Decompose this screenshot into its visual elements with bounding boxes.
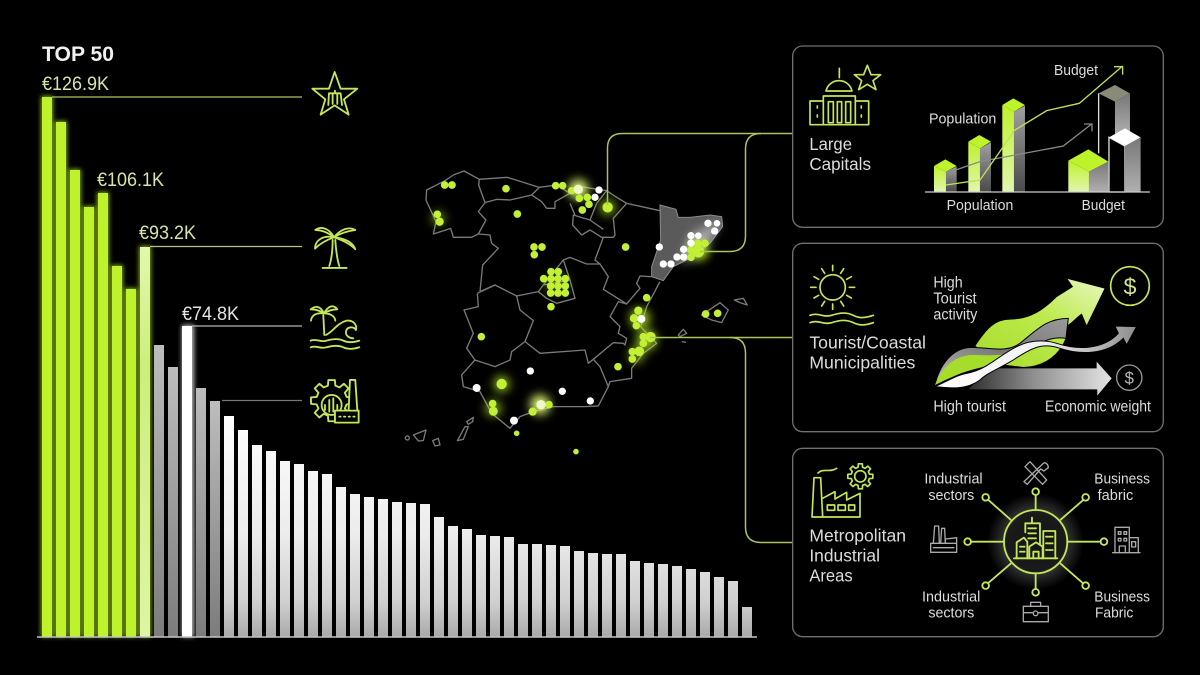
highlighted pale green bar: [140, 247, 150, 637]
connector lines: [608, 134, 792, 542]
panel: Metropolitan Industrial Areas: [793, 448, 1163, 637]
icon: gear and factory: [311, 380, 359, 423]
heading: TOP 50: TOP 50: [42, 43, 114, 66]
chart labels: Budget: [1054, 62, 1099, 79]
hub city icon: [1004, 510, 1067, 573]
icon: dollar small: [1117, 365, 1142, 390]
chart baseline: [37, 636, 757, 638]
icon: factory grey: [931, 526, 957, 552]
icon: palm and wave: [311, 306, 359, 349]
spoke labels: sectors: [928, 487, 974, 504]
icon: star monument: [312, 72, 357, 115]
label: High Tourist activity: Tourist: [933, 290, 977, 307]
axis labels: High tourist: [933, 399, 1007, 416]
heading: Large Capitals: Large: [809, 134, 852, 154]
trend lines: [946, 124, 1092, 173]
panel: Large Capitals: Capitals: [809, 154, 871, 174]
spoke labels: [922, 470, 1150, 622]
spoke labels: Industrial: [922, 589, 980, 606]
green municipality dots: [434, 182, 721, 454]
icon: capitol with star: [810, 65, 881, 125]
value label 93.2K: €93.2K: [139, 223, 196, 244]
heading: Tourist/Coastal Municipalities: Tourist/Coastal: [809, 332, 926, 352]
map glow layer: [432, 179, 718, 416]
green and grey band: [935, 318, 1068, 385]
spoke labels: Fabric: [1095, 605, 1134, 622]
axis labels: [933, 399, 1152, 416]
panel: Tourist/Coastal Municipalities: Municipalities: [809, 352, 915, 372]
spoke labels: Industrial: [924, 470, 983, 487]
3D budget bars: [1068, 85, 1141, 192]
green bars: [42, 97, 136, 637]
icon: palm tree: [315, 228, 355, 268]
region outlines: [405, 171, 747, 446]
bar glow: [41, 96, 194, 637]
panel: top 50 bar chart: [37, 43, 757, 637]
hub glow: [987, 493, 1084, 590]
white municipality dots: [473, 185, 720, 424]
panel: Tourist/Coastal Municipalities: [793, 243, 1163, 432]
big green arrow: [975, 278, 1105, 367]
value label 74.8K: €74.8K: [182, 304, 239, 325]
grey bars: [154, 345, 220, 637]
spoke labels: Business: [1094, 470, 1150, 487]
icon: briefcase: [1023, 602, 1048, 622]
chart baseline: [925, 190, 1150, 194]
spoke labels: sectors: [928, 605, 974, 622]
panel: Metropolitan Industrial Areas: Areas: [809, 566, 853, 586]
label: High Tourist activity: High: [933, 274, 963, 291]
icon: dollar small: $: [1125, 369, 1134, 388]
value label 106.1K: €106.1K: [97, 170, 164, 191]
label: High Tourist activity: activity: [933, 306, 978, 323]
icon: factory and gear: [812, 464, 873, 517]
chart labels: Population: [929, 110, 996, 127]
chart labels: [929, 62, 1126, 214]
3D population bars: [934, 98, 1025, 192]
highlighted white bar: [182, 326, 192, 637]
chart labels: Budget: [1082, 197, 1126, 214]
panel: map of Spain: [405, 171, 747, 454]
icon: office building: [1113, 527, 1140, 553]
spoke labels: Business: [1094, 589, 1150, 606]
axis labels: Economic weight: [1045, 399, 1152, 416]
spokes and nodes: [964, 488, 1107, 596]
white bars: [224, 416, 752, 637]
heading: Metropolitan Industrial Areas: Metropolitan: [809, 526, 906, 546]
icon: sun over waves: [810, 265, 873, 325]
icon: dollar large: [1111, 267, 1149, 305]
leader lines: [52, 97, 302, 400]
value label 126.9K: €126.9K: [42, 74, 109, 95]
spoke labels: fabric: [1098, 487, 1134, 504]
icon: dollar large: $: [1123, 273, 1136, 299]
chart labels: Population: [947, 197, 1013, 214]
Catalonia highlighted region: [652, 205, 723, 281]
grey arrow low: [968, 362, 1112, 396]
panel: Metropolitan Industrial Areas: Industrial: [809, 546, 880, 566]
panel: Large Capitals: [793, 46, 1163, 227]
label: High Tourist activity: [933, 274, 978, 323]
icon: tools: [1024, 462, 1048, 484]
white ribbon arrow: [935, 326, 1137, 388]
